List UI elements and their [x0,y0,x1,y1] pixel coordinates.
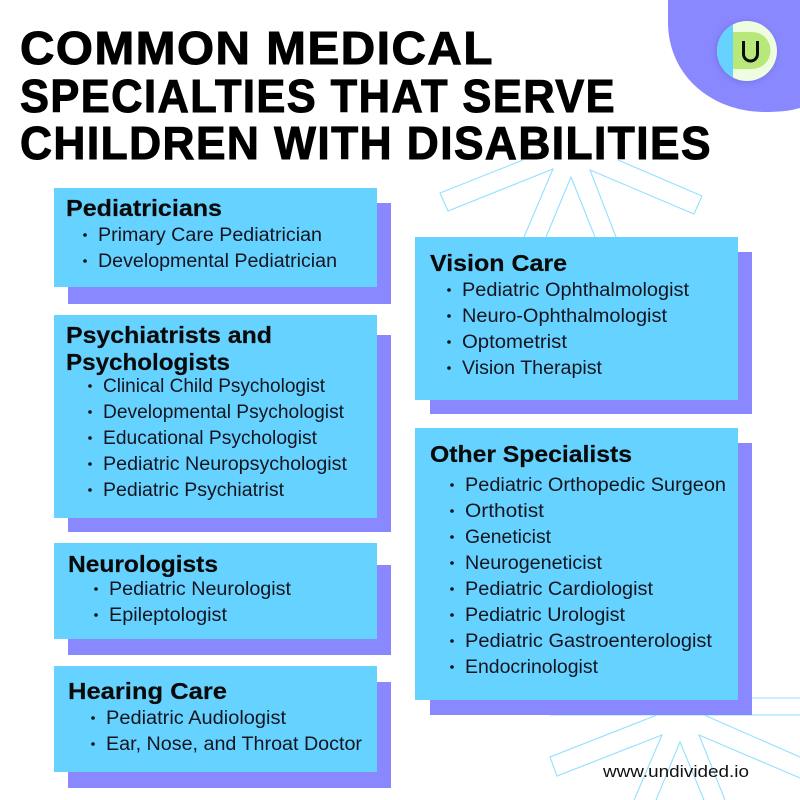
list: Other Specialists: Endocrinologist [465,657,599,678]
list: Pediatricians: Primary Care Pediatrician [98,225,322,246]
heading: Psychiatrists and Psychologists: Psychiatrists and [66,322,272,348]
list: Psychiatrists and Psychologists: Clinical Child Psychologist [103,376,326,397]
heading: Vision Care: Vision Care [430,250,567,276]
list: Other Specialists: Neurogeneticist [465,553,603,574]
title: COMMON MEDICAL [20,22,494,74]
list: Hearing Care: Pediatric Audiologist [106,708,287,729]
list: Neurologists [94,579,292,626]
heading: Other Specialists: Other Specialists [430,441,632,467]
list: Neurologists: Epileptologist [109,605,228,626]
list: Psychiatrists and Psychologists: Educational Psychologist [103,428,318,449]
list: Other Specialists: Pediatric Gastroenterologist [465,631,713,652]
title: CHILDREN WITH DISABILITIES [20,117,712,169]
title [20,22,712,169]
list: Vision Care: Neuro-Ophthalmologist [462,306,668,327]
list: Vision Care: Vision Therapist [462,358,603,379]
list: Pediatricians [83,225,337,272]
list: Vision Care: Pediatric Ophthalmologist [462,280,690,301]
heading: Neurologists: Neurologists [68,551,218,577]
decorative corner shape [668,0,800,112]
heading: Hearing Care: Hearing Care [68,678,227,704]
list: Vision Care [447,280,690,379]
heading: Psychiatrists and Psychologists: Psychologists [66,349,230,375]
list: Psychiatrists and Psychologists: Developmental Psychologist [103,402,345,423]
panel: Other Specialists [415,428,752,715]
heading: Psychiatrists and Psychologists [66,322,272,375]
list: Other Specialists [450,475,726,678]
panel: Hearing Care [54,666,391,788]
list: Hearing Care: Ear, Nose, and Throat Doctor [106,734,363,755]
list: Pediatricians: Developmental Pediatrician [98,251,337,272]
list: Vision Care: Optometrist [462,332,568,353]
list: Psychiatrists and Psychologists [88,376,348,501]
website url: www.undivided.io [602,762,749,781]
title: SPECIALTIES THAT SERVE [20,70,616,122]
list: Other Specialists: Orthotist [465,501,545,522]
panel: Psychiatrists and Psychologists [54,315,391,532]
icon: Undivided logo [715,21,777,83]
list: Other Specialists: Geneticist [465,527,552,548]
decorative rays top [440,160,702,237]
heading: Pediatricians: Pediatricians [66,195,222,221]
panel: Vision Care [415,237,752,414]
list: Other Specialists: Pediatric Cardiologist [465,579,654,600]
list: Neurologists: Pediatric Neurologist [109,579,292,600]
list: Other Specialists: Pediatric Urologist [465,605,626,626]
panel: Pediatricians [54,188,391,304]
list: Psychiatrists and Psychologists: Pediatric Neuropsychologist [103,454,348,475]
panel: Neurologists [54,543,391,655]
decorative rays bottom [550,698,800,800]
list: Psychiatrists and Psychologists: Pediatric Psychiatrist [103,480,285,501]
list: Other Specialists: Pediatric Orthopedic Surgeon [465,475,726,496]
list: Hearing Care [91,708,363,755]
